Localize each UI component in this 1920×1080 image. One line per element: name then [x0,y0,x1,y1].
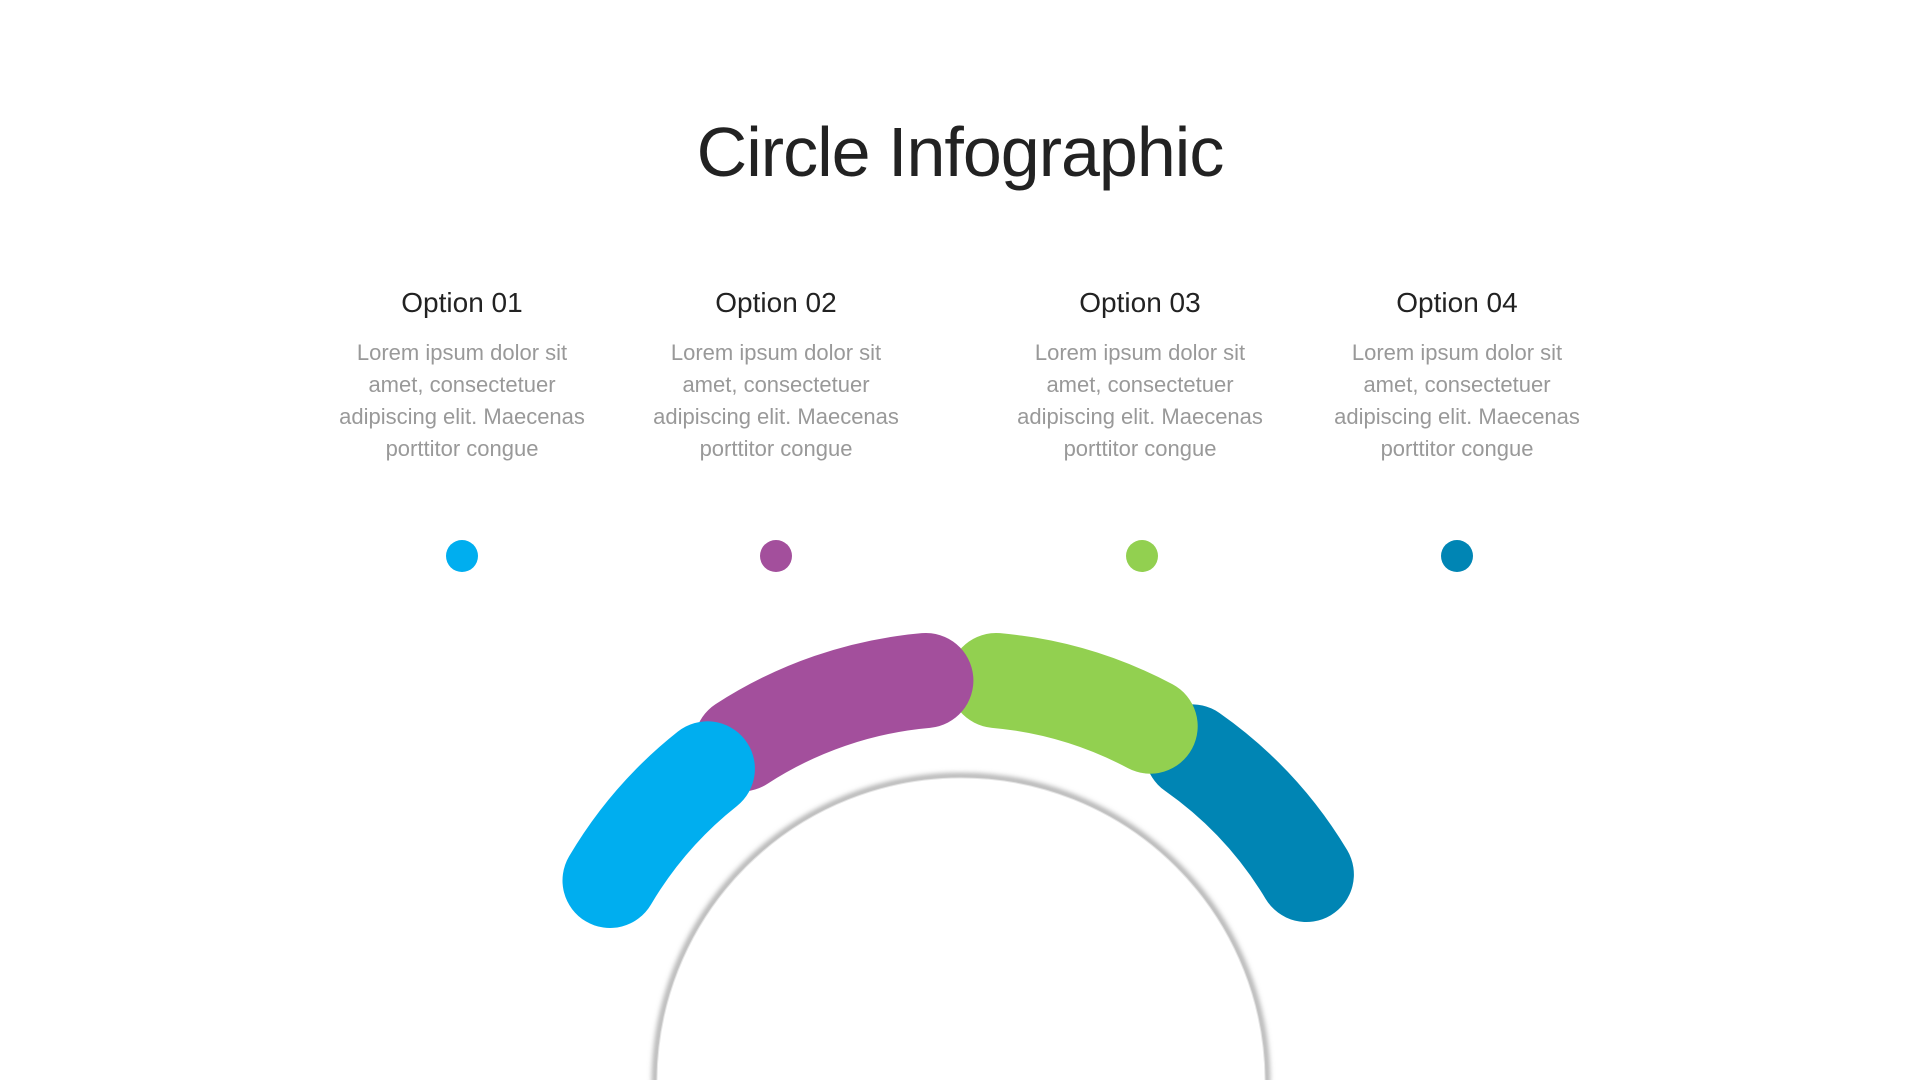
option 03 text: adipiscing elit. Maecenas [1017,404,1263,429]
option 01 text: amet, consectetuer [368,372,556,397]
option 01 text: Lorem ipsum dolor sit [357,340,567,365]
dot 04 [1441,540,1473,572]
option 01 text: porttitor congue [386,436,538,461]
option 04 text: amet, consectetuer [1363,372,1551,397]
arc 01 [610,769,707,880]
arc 03 [996,680,1150,726]
option 04 text: Lorem ipsum dolor sit [1352,340,1562,365]
option 02 text: Option 02 [715,287,837,318]
dot 01 [446,540,478,572]
option 04 text: porttitor congue [1381,436,1533,461]
arc 02 [742,680,926,744]
option 02 text [653,287,899,461]
dot 03 [1126,540,1158,572]
option 01 text [339,287,585,461]
option 04 text: adipiscing elit. Maecenas [1334,404,1580,429]
option 02 text: porttitor congue [700,436,852,461]
option 01 text: Option 01 [401,287,523,318]
central circle [655,776,1267,1080]
option 02 text: amet, consectetuer [682,372,870,397]
option 04 text: Option 04 [1396,287,1518,318]
option 01 text: adipiscing elit. Maecenas [339,404,585,429]
arc 04 [1192,752,1306,874]
option 02 text: Lorem ipsum dolor sit [671,340,881,365]
option 04 text [1334,287,1580,461]
dot 02 [760,540,792,572]
title: Circle Infographic [697,113,1223,191]
option 03 text: Option 03 [1079,287,1201,318]
option 03 text: porttitor congue [1064,436,1216,461]
option 03 text: amet, consectetuer [1046,372,1234,397]
option 03 text [1017,287,1263,461]
option 02 text: adipiscing elit. Maecenas [653,404,899,429]
option 03 text: Lorem ipsum dolor sit [1035,340,1245,365]
